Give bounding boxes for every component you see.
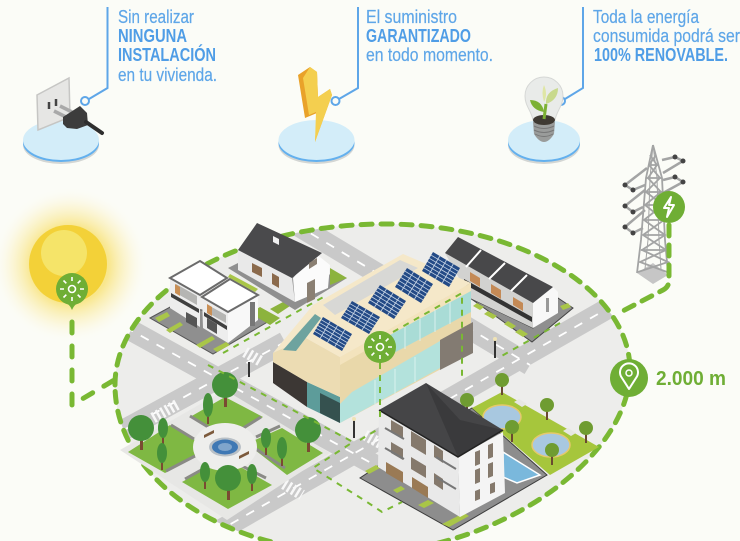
street lamps bbox=[248, 337, 497, 438]
apartment building with garden bbox=[360, 373, 599, 530]
dashed line from sun bbox=[72, 322, 116, 405]
callout 1: sin instalación: Sin realizar bbox=[118, 7, 194, 27]
icon: plug on disc bbox=[23, 78, 102, 164]
callout 2: suministro garantizado: en todo momento. bbox=[366, 45, 493, 65]
park with fountain bbox=[120, 372, 330, 520]
street network bbox=[122, 229, 612, 532]
main building with solar panels bbox=[273, 252, 473, 423]
dashed boundary of the 2 km community bbox=[115, 224, 630, 541]
pylon energy badge bbox=[653, 191, 685, 223]
location badge and distance: 2.000 m bbox=[656, 368, 726, 390]
callout 2: suministro garantizado: El suministro bbox=[366, 7, 457, 27]
row of four terraced houses bbox=[445, 237, 573, 342]
callout 1: sin instalación: INSTALACIÓN bbox=[118, 44, 216, 65]
sun badge bbox=[56, 273, 88, 310]
gabled house bbox=[228, 223, 347, 310]
callout 1: sin instalación: en tu vivienda. bbox=[118, 65, 217, 85]
callout 1: sin instalación: NINGUNA bbox=[118, 26, 187, 46]
location badge and distance bbox=[610, 359, 726, 397]
community area ground bbox=[115, 224, 630, 541]
thin dashed connection lines bbox=[208, 293, 560, 512]
power pylon bbox=[622, 145, 686, 284]
dashed line from pylon bbox=[617, 225, 669, 314]
callout 2: suministro garantizado bbox=[332, 7, 493, 105]
callout 3: 100% renovable bbox=[557, 7, 740, 105]
twin flat-roof houses bbox=[150, 261, 290, 354]
building sun badge bbox=[364, 331, 396, 363]
icon: light bulb with sprout on disc bbox=[508, 77, 580, 164]
callout 2: suministro garantizado: GARANTIZADO bbox=[366, 26, 471, 46]
callout 3: 100% renovable: Toda la energía bbox=[593, 7, 700, 27]
callout 1: sin instalación bbox=[81, 7, 217, 105]
icon: lightning bolt on disc bbox=[278, 67, 354, 164]
sun with glow bbox=[0, 187, 148, 343]
